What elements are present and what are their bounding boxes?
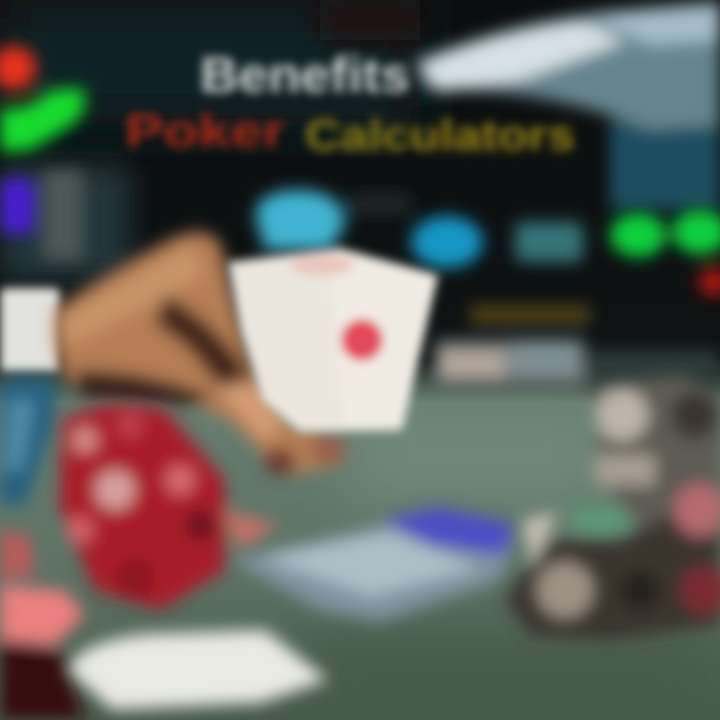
hand shadow between fingers <box>155 295 250 395</box>
title: Benefits <box>200 47 410 103</box>
table highlights <box>300 410 720 720</box>
fingertips <box>264 448 296 476</box>
hand shadow below palm <box>75 370 215 405</box>
icon: blue tile <box>411 216 483 268</box>
icon: cyan tile <box>255 190 345 250</box>
building graphic top right <box>415 0 720 210</box>
hand <box>54 232 346 476</box>
right chip stacks <box>505 375 720 640</box>
icon: teal tile <box>515 222 583 262</box>
white paper <box>68 630 328 710</box>
icon: green blob <box>0 88 85 152</box>
calculator <box>232 507 515 622</box>
title <box>125 47 575 160</box>
red poker chips <box>60 404 278 610</box>
icon: green lights <box>610 213 666 257</box>
left colour blobs <box>0 46 85 260</box>
white cuff <box>0 288 60 372</box>
info tiles <box>255 190 720 296</box>
calculator screen <box>382 507 515 555</box>
title: Poker <box>125 105 285 157</box>
icon: red light <box>698 268 720 296</box>
playing cards <box>228 248 438 432</box>
icon: purple blob <box>0 178 34 234</box>
bottom-left chip stack <box>0 530 85 720</box>
blue sleeve <box>0 378 55 505</box>
icon: red blob <box>0 46 36 90</box>
icon: card suit <box>341 319 383 361</box>
title: Calculators <box>305 111 575 160</box>
small caption panel <box>435 305 720 390</box>
